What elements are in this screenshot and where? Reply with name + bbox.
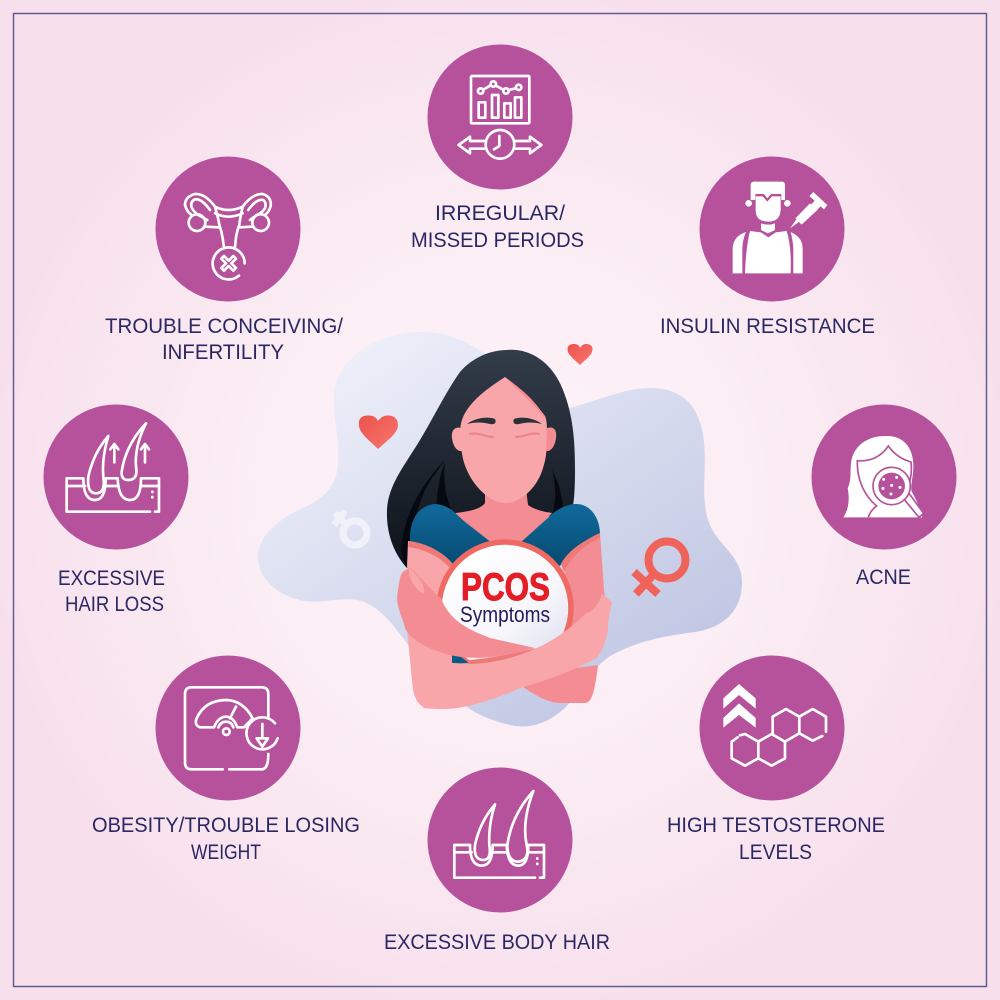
shoulder trim right xyxy=(561,533,600,572)
body left upper arm xyxy=(407,541,455,610)
icon circle xyxy=(700,156,844,302)
female symbol white xyxy=(334,511,367,545)
left hand and forearm xyxy=(397,568,535,658)
label: HIGH TESTOSTERONE xyxy=(667,813,885,837)
icon: chart and clock xyxy=(459,76,541,159)
heart large xyxy=(359,416,398,449)
closed eyes xyxy=(470,434,539,437)
icon: skin with rising hairs xyxy=(67,423,159,512)
lower right forearm shadow xyxy=(523,665,598,703)
item: excessive hair loss xyxy=(44,404,188,616)
label: OBESITY/TROUBLE LOSING xyxy=(92,813,360,837)
badge subtitle: Symptoms xyxy=(460,602,550,627)
badge xyxy=(439,542,571,674)
right arm highlight xyxy=(587,589,602,613)
forehead shadow xyxy=(505,377,546,420)
icon circle xyxy=(812,404,956,550)
label: INSULIN RESISTANCE xyxy=(660,314,875,338)
item: irregular/missed periods xyxy=(411,44,584,252)
left ear xyxy=(452,428,462,451)
icon circle xyxy=(428,44,572,190)
label: HAIR LOSS xyxy=(65,592,164,616)
label: LEVELS xyxy=(739,840,812,864)
label: ACNE xyxy=(856,565,911,589)
item: obesity/trouble losing weight xyxy=(92,656,360,864)
neck and chest xyxy=(455,480,552,545)
hair strand inner right xyxy=(552,470,563,513)
icon: man and syringe xyxy=(733,182,827,273)
icon: chevrons and molecule xyxy=(723,684,826,766)
icon: skin with long hairs xyxy=(454,791,544,878)
label xyxy=(92,813,360,864)
label xyxy=(58,566,165,616)
badge title: PCOS xyxy=(461,566,550,609)
shirt bottom sliver xyxy=(452,650,470,664)
label: INFERTILITY xyxy=(162,340,284,364)
icon circle xyxy=(428,768,572,912)
label xyxy=(667,813,885,864)
icon circle xyxy=(156,156,300,302)
item: insulin resistance xyxy=(660,156,875,338)
label xyxy=(105,314,343,364)
label: MISSED PERIODS xyxy=(411,228,584,252)
background blob xyxy=(258,332,742,726)
label: TROUBLE CONCEIVING/ xyxy=(105,314,343,338)
face xyxy=(460,377,547,503)
female symbol red xyxy=(634,542,686,594)
icon circle xyxy=(44,404,188,550)
hair strand inner left xyxy=(437,462,452,515)
right forearm xyxy=(407,590,612,709)
item: excessive body hair xyxy=(384,768,610,954)
icon: weighing scale xyxy=(185,687,278,769)
lower arm seam xyxy=(468,648,537,664)
label: EXCESSIVE xyxy=(58,566,165,590)
central illustration: woman hugging PCOS badge xyxy=(258,332,742,726)
heart small xyxy=(568,344,592,365)
label: WEIGHT xyxy=(191,840,261,864)
right ear xyxy=(546,427,556,451)
icon circle xyxy=(700,656,844,800)
item: trouble conceiving/infertility xyxy=(105,156,343,364)
shirt right xyxy=(520,504,600,566)
label xyxy=(411,201,584,252)
eyebrows xyxy=(467,418,542,424)
left torso arm xyxy=(407,630,470,708)
shoulder trim left xyxy=(408,541,455,572)
item: acne xyxy=(812,404,956,589)
icon: woman with magnifier xyxy=(843,436,924,517)
label: IRREGULAR/ xyxy=(435,201,565,225)
icon: uterus with cross xyxy=(185,194,271,279)
label: EXCESSIVE BODY HAIR xyxy=(384,930,610,954)
shirt left xyxy=(410,504,492,566)
hair strands xyxy=(401,460,445,568)
icon circle xyxy=(156,656,300,800)
body right upper arm xyxy=(564,533,606,630)
item: high testosterone levels xyxy=(667,656,885,864)
hair xyxy=(387,350,575,568)
left arm highlight xyxy=(409,568,424,594)
